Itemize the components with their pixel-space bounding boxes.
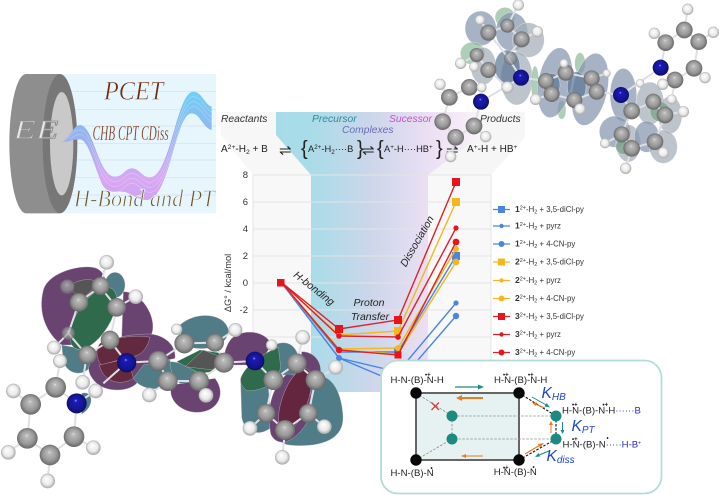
radical and charge marks: •+ — [503, 372, 509, 378]
rate constant labels: K — [572, 418, 582, 435]
reaction equation: A — [221, 144, 228, 155]
header labels: Precursor — [312, 114, 357, 125]
chart annotation: Proton Transfer: Transfer — [351, 311, 390, 323]
legend labels: 2 — [534, 298, 537, 304]
legend labels: + 3,5-diCl-py — [537, 312, 584, 321]
legend labels: 3 — [515, 329, 520, 339]
handwritten label: rate constants: CHB CPT CDiss — [93, 123, 169, 145]
radical and charge marks: • — [430, 466, 433, 472]
legend labels: 2 — [515, 275, 520, 285]
legend labels: 1 — [515, 204, 520, 214]
legend labels: 2 — [534, 244, 537, 250]
legend labels: 2+ — [520, 294, 526, 300]
series: blue — [281, 252, 460, 383]
legend labels: -H — [526, 312, 534, 321]
rate constant labels: PT — [582, 425, 596, 436]
chart annotation: Proton Transfer: Proton — [354, 297, 385, 309]
legend labels: + 4-CN-py — [537, 348, 575, 357]
panel: shaded reaction regions — [221, 112, 525, 392]
header labels: Reactants — [221, 114, 267, 125]
handwritten label: H-Bond and PT: H-Bond and PT — [73, 187, 216, 213]
legend labels: + 3,5-diCl-py — [537, 205, 584, 214]
arrows — [455, 384, 564, 458]
legend — [493, 204, 584, 358]
series: yellow — [281, 198, 460, 354]
legend labels: -H — [526, 276, 534, 285]
header labels — [221, 114, 521, 136]
radical and charge marks: • — [532, 465, 535, 471]
legend labels: 2 — [534, 280, 537, 286]
species labels: H-N-(B)-N-H······B — [562, 406, 641, 416]
legend labels: 2+ — [520, 206, 526, 212]
legend labels: 2+ — [520, 240, 526, 246]
legend labels: 1 — [515, 238, 520, 248]
legend labels: + 4-CN-py — [537, 240, 575, 248]
legend labels: 2+ — [520, 276, 526, 282]
legend labels: -H — [526, 222, 534, 230]
legend labels: 2+ — [520, 222, 526, 228]
header labels: Sucessor — [389, 114, 432, 125]
radical and charge marks: •+ — [503, 466, 509, 472]
icon: blocked pathway cross — [432, 402, 439, 410]
rate constant labels: HB — [552, 392, 566, 403]
legend labels: 2+ — [520, 330, 526, 336]
reaction equation: } — [357, 138, 364, 160]
species labels: H-N-(B)-N-H — [390, 375, 444, 386]
panel: kinetic scheme inset — [381, 360, 662, 494]
legend labels: -H — [526, 205, 534, 214]
reaction equation: 2+ — [314, 144, 322, 151]
radical and charge marks — [425, 372, 609, 472]
inset frame — [381, 360, 662, 494]
molecule: bottom-left orbital model — [1, 255, 343, 488]
reaction equation: -H + HB — [478, 144, 514, 155]
legend labels: -H — [526, 330, 534, 339]
header labels: Products — [480, 114, 521, 125]
legend labels: 2+ — [520, 348, 526, 354]
series: red — [277, 178, 460, 358]
reaction equation: + — [474, 144, 478, 151]
reaction equation: + — [390, 144, 394, 151]
scheme square — [416, 393, 519, 460]
y axis tick labels: 6 — [243, 197, 248, 208]
species labels: H-N-(B)-N·····H-B — [562, 440, 638, 451]
reaction equation: A — [384, 144, 390, 154]
y axis tick labels — [240, 170, 248, 316]
reaction equation: + — [514, 144, 518, 151]
radical and charge marks: •+ — [602, 402, 609, 408]
y axis tick labels: 8 — [243, 170, 248, 181]
reaction equation: ⇌ — [362, 142, 375, 159]
legend labels: + pyrz — [537, 330, 561, 339]
reaction equation: + — [429, 144, 433, 151]
radical and charge marks: •+ — [425, 372, 431, 378]
legend labels: 3 — [515, 347, 520, 357]
y axis tick labels: 2 — [243, 251, 248, 262]
reaction equation: -H — [235, 144, 246, 155]
panel: electrode and PCET sketch — [9, 74, 216, 213]
rate constant labels — [542, 385, 596, 466]
species labels: H-N-(B)-N-H — [494, 375, 547, 386]
species labels: + — [638, 441, 641, 447]
atoms — [1, 255, 343, 488]
nodes — [410, 387, 562, 466]
reaction equation: A — [308, 144, 314, 154]
reaction equation: -H — [321, 144, 331, 154]
orbital lobes — [460, 7, 682, 163]
reaction equation: 2 — [331, 149, 335, 156]
legend labels: -H — [526, 258, 534, 266]
bonds — [8, 262, 336, 481]
y axis title: ΔG° / kcal/mol — [223, 254, 233, 312]
orbital lobes — [41, 267, 343, 446]
reaction equation: { — [377, 138, 384, 160]
gridlines and axes — [253, 175, 491, 365]
notebook background — [60, 74, 216, 213]
reaction equation: ⇌ — [279, 142, 292, 159]
radical and charge marks: • — [606, 436, 609, 442]
legend labels: -H — [526, 240, 534, 248]
legend labels: 2+ — [520, 258, 526, 264]
reaction equation: A — [467, 144, 474, 155]
radical and charge marks: •+ — [572, 437, 578, 443]
legend labels: 2 — [534, 352, 537, 358]
reaction equation: -H····HB — [394, 144, 429, 154]
species labels: H-N-(B)-N — [494, 467, 537, 478]
reaction equation: ····B — [335, 144, 353, 154]
rate constant labels: K — [542, 385, 552, 402]
rate constant labels: K — [546, 448, 557, 465]
header labels: Complexes — [342, 125, 394, 136]
handwritten label: EE: EE — [12, 114, 58, 144]
legend labels: -H — [526, 348, 534, 357]
rate constant labels: diss — [557, 455, 575, 466]
species labels: H-N-(B)-N — [390, 468, 434, 479]
legend labels — [515, 204, 584, 358]
legend labels: + 3,5-diCl-py — [537, 258, 584, 266]
legend labels: -H — [526, 294, 534, 303]
reaction equation: + B — [250, 144, 268, 155]
energy surface wave — [62, 92, 212, 200]
species labels — [390, 375, 641, 479]
legend labels: 2+ — [520, 312, 526, 318]
y axis tick labels: 0 — [243, 278, 248, 289]
legend labels: 2 — [515, 256, 520, 266]
legend labels: 2 — [534, 262, 537, 268]
legend labels: 2 — [534, 226, 537, 232]
legend labels: + 4-CN-py — [537, 294, 575, 303]
legend labels: 2 — [534, 210, 537, 216]
radical and charge marks: •+ — [572, 402, 578, 408]
legend markers — [493, 206, 510, 356]
dashed reaction paths — [416, 393, 556, 460]
legend labels: 2 — [534, 316, 537, 322]
y axis tick labels: 4 — [243, 224, 248, 235]
legend labels: 1 — [515, 220, 520, 230]
handwritten label: PCET: PCET — [103, 76, 165, 105]
reaction equation: { — [301, 138, 308, 160]
legend labels: 2 — [534, 334, 537, 340]
reaction equation: ⇌ — [446, 142, 459, 159]
legend labels: 3 — [515, 311, 520, 321]
reaction equation: 2 — [246, 149, 250, 156]
line chart: free energy profile — [223, 170, 491, 383]
bonds — [440, 5, 713, 168]
molecule: top-right orbital model — [434, 0, 719, 174]
icon: electrode cylinder — [9, 74, 77, 213]
chart annotation: H-bonding: H-bonding — [291, 269, 337, 308]
chart annotation: Dissociation: Dissociation — [398, 214, 437, 269]
reaction equation: } — [436, 138, 443, 160]
radical and charge marks: •+ — [528, 372, 534, 378]
legend labels: 2 — [515, 293, 520, 303]
reaction equation: 2+ — [228, 144, 235, 151]
legend labels: + pyrz — [537, 276, 561, 285]
atoms — [434, 0, 719, 174]
y axis tick labels: -2 — [240, 305, 248, 316]
reaction equation — [221, 138, 518, 160]
legend labels: + pyrz — [537, 222, 561, 230]
